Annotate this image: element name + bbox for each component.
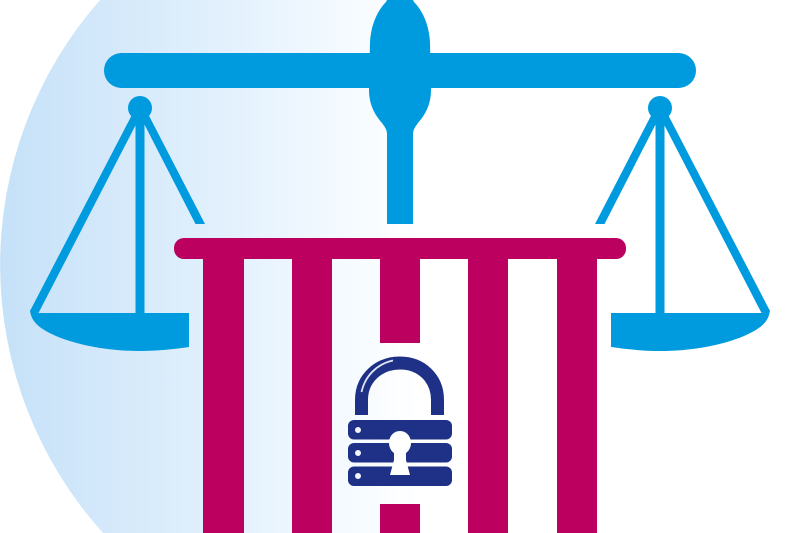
left scale pan (30, 96, 205, 351)
right scale pan (595, 96, 770, 351)
scale beam and central post (104, 0, 696, 224)
padlock body bars (348, 420, 452, 486)
padlock indicator dots (355, 427, 361, 479)
padlock shackle (362, 363, 438, 415)
icon: padlock (348, 360, 452, 486)
background circle (0, 0, 420, 533)
padlock keyhole (389, 431, 411, 475)
pillar with striped columns (174, 238, 626, 533)
